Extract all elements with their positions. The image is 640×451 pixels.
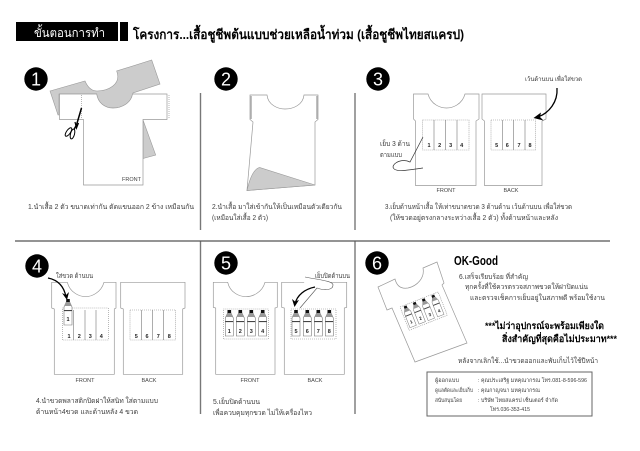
heading: OK-Good: OK-Good (454, 254, 498, 268)
caption 1: 1.นำเสื้อ 2 ตัว ขนาดเท่ากัน ตัดแขนออก 2 ข้าง เหมือนกัน (28, 200, 194, 211)
advice text: 6.เสร็จเรียบร้อย ที่สำคัญ (459, 272, 528, 281)
layered shirt (247, 95, 318, 190)
back pockets: 6 (506, 143, 509, 149)
number badge 4 (25, 254, 49, 278)
front bottles: 2 (239, 329, 242, 335)
front shirt (213, 282, 277, 374)
grey shirt behind (50, 60, 160, 158)
credits box: : บริษัท ไทยสแครป เซ็นเตอร์ จำกัด (478, 396, 558, 404)
needle and thread (300, 277, 333, 308)
front bottles (223, 309, 268, 339)
front shirt (60, 94, 167, 185)
caption 5: 5.เย็บปิดด้านบน (213, 397, 260, 406)
finished shirt bottles: 3 (428, 312, 432, 317)
credits box: : คุณประเสริฐ มหคุณากรณ โทร.081-8-596-596 (478, 376, 587, 384)
note: sew top closed: เย็บปิดด้านบน (315, 271, 350, 280)
advice text (459, 272, 605, 302)
caption 4 (36, 396, 158, 416)
finished shirt bottles: 2 (418, 315, 423, 321)
caption 2: 2.นำเสื้อ มาใส่เข้ากันให้เป็นเหมือนตัวเดียวกัน (212, 200, 342, 211)
front bottles: 1 (228, 329, 231, 335)
note: top opening: เว้นด้านบน เพื่อใส่ขวด (525, 75, 582, 83)
garment labels: FRONT (241, 378, 260, 384)
finished shirt bottles: 1 (409, 319, 414, 325)
advice text: และตรวจเช็คการเย็บอยู่ในสภาพดี พร้อมใช้งาน (470, 293, 605, 302)
back bottles: 8 (328, 329, 331, 335)
front shirt (414, 94, 479, 186)
back pockets (491, 120, 536, 150)
credits box: ดูแลตัดและเย็บเก็บ (435, 386, 473, 394)
front pockets: 3 (449, 143, 452, 149)
credits box: ผู้ออกแบบ (435, 377, 460, 384)
number badge 1: 1 (31, 70, 41, 90)
folded corner (247, 168, 315, 190)
note: sew three sides: ตามแบบ (380, 152, 402, 159)
caption 2 (212, 200, 342, 222)
credits box: : คุณกาญจนา มหคุณากรณ (478, 388, 540, 394)
credits box: สนับสนุนโดย (435, 396, 462, 404)
back pockets: 5 (135, 334, 138, 340)
warning text (485, 320, 617, 345)
number badge 6: 6 (372, 254, 382, 274)
finished shirt bottles: 4 (437, 308, 442, 314)
note: insert bottle: ใส่ขวด ด้านบน (56, 272, 93, 280)
garment labels: BACK (308, 378, 323, 384)
back pockets: 8 (528, 143, 532, 149)
arrow (534, 88, 557, 120)
title: โครงการ...เสื้อชูชีพต้นแบบช่วยเหลือน้ำท่วม (เสื้อชูชีพไทยสแครป) (132, 24, 464, 43)
caption 5 (213, 397, 312, 417)
front pockets (423, 120, 469, 150)
garment labels: FRONT (76, 378, 95, 384)
number badge 5: 5 (221, 254, 231, 274)
panel: step 5 (213, 251, 350, 417)
number badge 2: 2 (221, 70, 231, 90)
front pockets: 1 (427, 143, 431, 149)
warning text: สิ่งสำคัญที่สุดคือไม่ประมาท*** (502, 331, 617, 345)
back pockets: 7 (157, 334, 160, 340)
front bottles: 3 (250, 329, 253, 335)
needle and thread (393, 137, 423, 171)
front label: FRONT (122, 177, 142, 183)
back bottles: 7 (317, 329, 320, 335)
number badge 1 (24, 67, 48, 91)
cut lines (82, 95, 169, 119)
icon: scissors (64, 108, 82, 139)
front pockets: 2 (78, 334, 81, 340)
garment labels (241, 378, 323, 384)
back bottles (291, 309, 336, 339)
panel: step 3 (366, 67, 582, 222)
panel: step 1 (24, 60, 194, 211)
number badge 5 (214, 251, 238, 275)
front shirt (52, 282, 116, 374)
number badge 4: 4 (32, 256, 42, 276)
front pockets: 2 (438, 143, 441, 149)
back shirt (121, 282, 185, 374)
header accent block (120, 22, 128, 41)
caption 4: 4.นำขวดพลาสติกปิดฝาให้สนิท ใส่ตามแบบ (36, 396, 158, 405)
arrow (48, 278, 69, 300)
number badge 6 (365, 251, 389, 275)
back pockets: 8 (168, 334, 171, 340)
bottle being inserted (64, 299, 72, 325)
back pockets: 5 (495, 143, 498, 149)
panel: step 2 (212, 67, 342, 222)
garment labels (437, 188, 519, 194)
caption 4: ด้านหน้า4ขวด และด้านหลัง 4 ขวด (36, 408, 138, 416)
caption 5: เพื่อควบคุมทุกขวด ไม่ให้เครื่องไหว (213, 408, 312, 417)
warning text: ***ไม่ว่าอุปกรณ์จะพร้อมเพียงใด (485, 320, 604, 332)
credits box (427, 372, 592, 416)
garment labels: BACK (142, 378, 157, 384)
panel: step 4 (25, 254, 185, 416)
back shirt (482, 94, 546, 186)
back bottles: 5 (294, 329, 298, 335)
header label (16, 22, 118, 41)
back pockets: 6 (145, 334, 149, 340)
advice text: ทุกครั้งที่ใช้ควรตรวจสภาพขวดให้ฝาปิดแน่น (465, 280, 588, 291)
finished shirt bottles (400, 292, 447, 330)
after-use note: หลังจากเลิกใช้...นำขวดออกและพับเก็บไว้ใช้ปีหน้า (458, 356, 598, 365)
caption 3: (ให้ขวดอยู่ตรงกลางระหว่างเสื้อ 2 ตัว) ทั้งด้านหน้าและหลัง (390, 211, 558, 222)
front pockets (62, 308, 108, 340)
bottle being inserted: 1 (66, 317, 70, 323)
garment labels (76, 378, 157, 384)
caption 2: (เหมือนใส่เสื้อ 2 ตัว) (212, 211, 268, 222)
garment labels: BACK (504, 188, 519, 194)
front pockets: 4 (100, 334, 104, 340)
credits box: โทร.036-353-415 (490, 405, 530, 413)
front pockets: 1 (67, 334, 71, 340)
note: sew three sides (380, 139, 410, 159)
front pockets: 4 (460, 143, 464, 149)
number badge 3 (366, 67, 390, 91)
number badge 3: 3 (373, 70, 383, 90)
note: sew three sides: เย็บ 3 ด้าน (380, 139, 410, 148)
arrow (292, 287, 315, 307)
back shirt (282, 282, 347, 374)
header label: ขั้นตอนการทำ (34, 24, 105, 40)
sleeve seams (251, 96, 317, 119)
front bottles: 4 (261, 329, 265, 335)
panel: step 6 (365, 251, 617, 416)
front pockets: 3 (89, 334, 92, 340)
back pockets (130, 310, 176, 340)
caption 3 (385, 200, 572, 222)
back pockets: 7 (517, 143, 521, 149)
back bottles: 6 (306, 329, 309, 335)
caption 3: 3.เย็บด้านหน้าเสื้อ ให้เท่าขนาดขวด 3 ด้านด้าน เว้นด้านบน เพื่อใส่ขวด (385, 200, 572, 211)
finished shirt (378, 262, 467, 362)
garment labels: FRONT (437, 188, 456, 194)
number badge 2 (214, 67, 238, 91)
